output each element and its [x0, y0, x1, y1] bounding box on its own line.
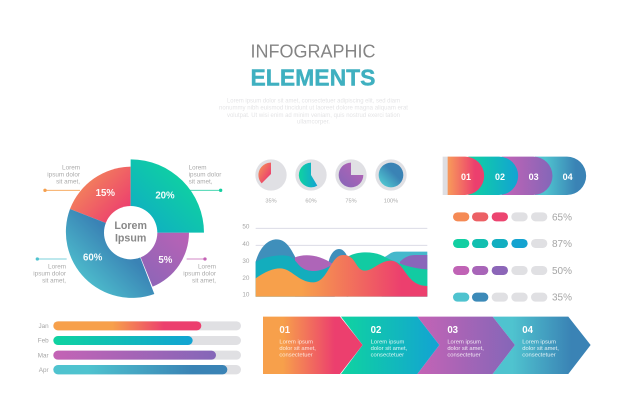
subtitle text block: Lorem ipsum dolor sit amet, consectetuer adipiscing elit, sed diam	[227, 98, 400, 104]
arrow 03	[417, 317, 515, 374]
tab numbers	[461, 172, 573, 182]
subtitle text block: ullamcorper.	[297, 118, 330, 126]
tab numbers: 04	[563, 172, 573, 182]
percent labels: 20%	[155, 190, 175, 201]
arrow text: consectetuer	[447, 353, 481, 359]
pie labels: 35%	[265, 198, 277, 204]
row 87%: 87%	[552, 239, 572, 250]
row 50%: 50%	[552, 266, 572, 277]
center label	[114, 220, 147, 245]
callout labels: sit amet,	[189, 179, 213, 186]
blue area	[256, 239, 348, 297]
title: INFOGRAPHIC	[250, 40, 376, 62]
panel: small pie charts	[255, 159, 407, 204]
title: ELEMENTS	[250, 65, 376, 91]
center hole	[104, 206, 157, 259]
arrow text: dolor sit amet,	[522, 346, 559, 352]
bar Feb	[38, 336, 241, 345]
light teal area	[382, 252, 427, 297]
pie 35%	[255, 159, 287, 191]
arrow text: 02	[371, 325, 381, 336]
arrow text: consectetuer	[279, 353, 313, 359]
pie labels: 60%	[305, 198, 317, 204]
tab 01	[448, 157, 484, 195]
callout labels	[33, 164, 221, 284]
tab 03	[502, 157, 552, 195]
callout labels: Lorem	[62, 164, 80, 171]
arrow text: consectetuer	[371, 353, 404, 359]
tab 02	[468, 157, 518, 195]
arrow text: 01	[279, 325, 291, 336]
panel: numbered tabs	[443, 157, 586, 195]
panel: area chart	[242, 224, 427, 299]
axis labels: 10	[242, 292, 250, 299]
row 35%: 35%	[552, 293, 572, 304]
center label: Lorem	[114, 220, 147, 232]
segment 60%	[66, 209, 154, 298]
arrow text: Lorem ipsum	[447, 339, 481, 345]
pie 60%	[295, 159, 327, 191]
subtitle text block: nonummy nibh euismod tincidunt ut laoreet dolore magna aliquam erat	[219, 104, 408, 112]
pie labels	[265, 198, 398, 204]
title	[250, 40, 376, 91]
bar Jan	[38, 321, 241, 330]
panel: donut chart	[33, 159, 222, 298]
leader lines	[36, 189, 222, 261]
bar Apr: Apr	[39, 367, 49, 374]
axis labels: 20	[242, 275, 250, 282]
bar Jan: Jan	[38, 323, 49, 330]
callout labels: Lorem	[189, 164, 207, 171]
arrow text: consectetuer	[522, 353, 556, 359]
callout labels: sit amet,	[42, 277, 66, 284]
axis labels: 50	[242, 224, 250, 231]
arrow 01	[263, 317, 363, 374]
subtitle text block	[219, 98, 408, 126]
callout labels: ipsum dolor	[47, 172, 80, 179]
axis labels	[242, 224, 250, 299]
panel: arrow process	[263, 317, 591, 374]
arrow text: dolor sit amet,	[279, 346, 316, 352]
tab 04	[535, 157, 586, 195]
tab numbers: 01	[461, 172, 471, 182]
callout labels: sit amet,	[192, 277, 216, 284]
arrow text: dolor sit amet,	[371, 346, 408, 352]
arrow 04	[493, 317, 591, 374]
callout labels: Lorem	[198, 263, 216, 270]
bar Mar	[38, 351, 241, 360]
arrow text: 03	[447, 325, 459, 336]
callout labels: ipsum dolor	[33, 270, 66, 277]
arrow text: Lorem ipsum	[371, 339, 404, 345]
segment 15%	[70, 167, 131, 233]
panel: horizontal bars	[38, 321, 241, 374]
callout labels: Lorem	[48, 263, 66, 270]
bar Apr	[39, 365, 241, 374]
pie 75%	[335, 159, 367, 191]
segment 5%	[131, 233, 189, 287]
arrow 02	[341, 317, 439, 374]
arrow text: Lorem ipsum	[522, 339, 556, 345]
teal area	[256, 255, 335, 297]
panel: pill ratings	[453, 212, 572, 304]
subtitle text block: volutpat. Ut wisi enim ad minim veniam, quis nostrud exerci tation	[227, 112, 400, 119]
segment 20%	[131, 159, 204, 233]
callout labels: ipsum dolor	[183, 270, 216, 277]
tab numbers: 02	[495, 172, 505, 182]
tab numbers: 03	[529, 172, 539, 182]
purple area	[295, 255, 334, 297]
pie labels: 75%	[345, 198, 357, 204]
center label: Ipsum	[115, 233, 146, 245]
axis labels: 30	[242, 258, 250, 265]
bar Feb: Feb	[38, 338, 49, 345]
percent labels: 15%	[96, 188, 115, 199]
orange to red area	[256, 255, 427, 297]
arrow text: 04	[522, 325, 534, 336]
row 65%: 65%	[552, 212, 572, 223]
arrow text: dolor sit amet,	[447, 346, 484, 352]
axis labels: 40	[242, 241, 250, 248]
arrow text: Lorem ipsum	[279, 339, 313, 345]
pie 100%	[375, 159, 407, 191]
arrow text	[279, 325, 559, 359]
percent labels: 5%	[158, 255, 173, 266]
pie labels: 100%	[384, 198, 398, 204]
callout labels: sit amet,	[56, 179, 80, 186]
percent labels	[83, 188, 175, 266]
percent labels: 60%	[83, 253, 103, 264]
callout labels: ipsum dolor	[189, 172, 221, 179]
bar Mar: Mar	[38, 352, 49, 359]
green area	[347, 252, 427, 297]
